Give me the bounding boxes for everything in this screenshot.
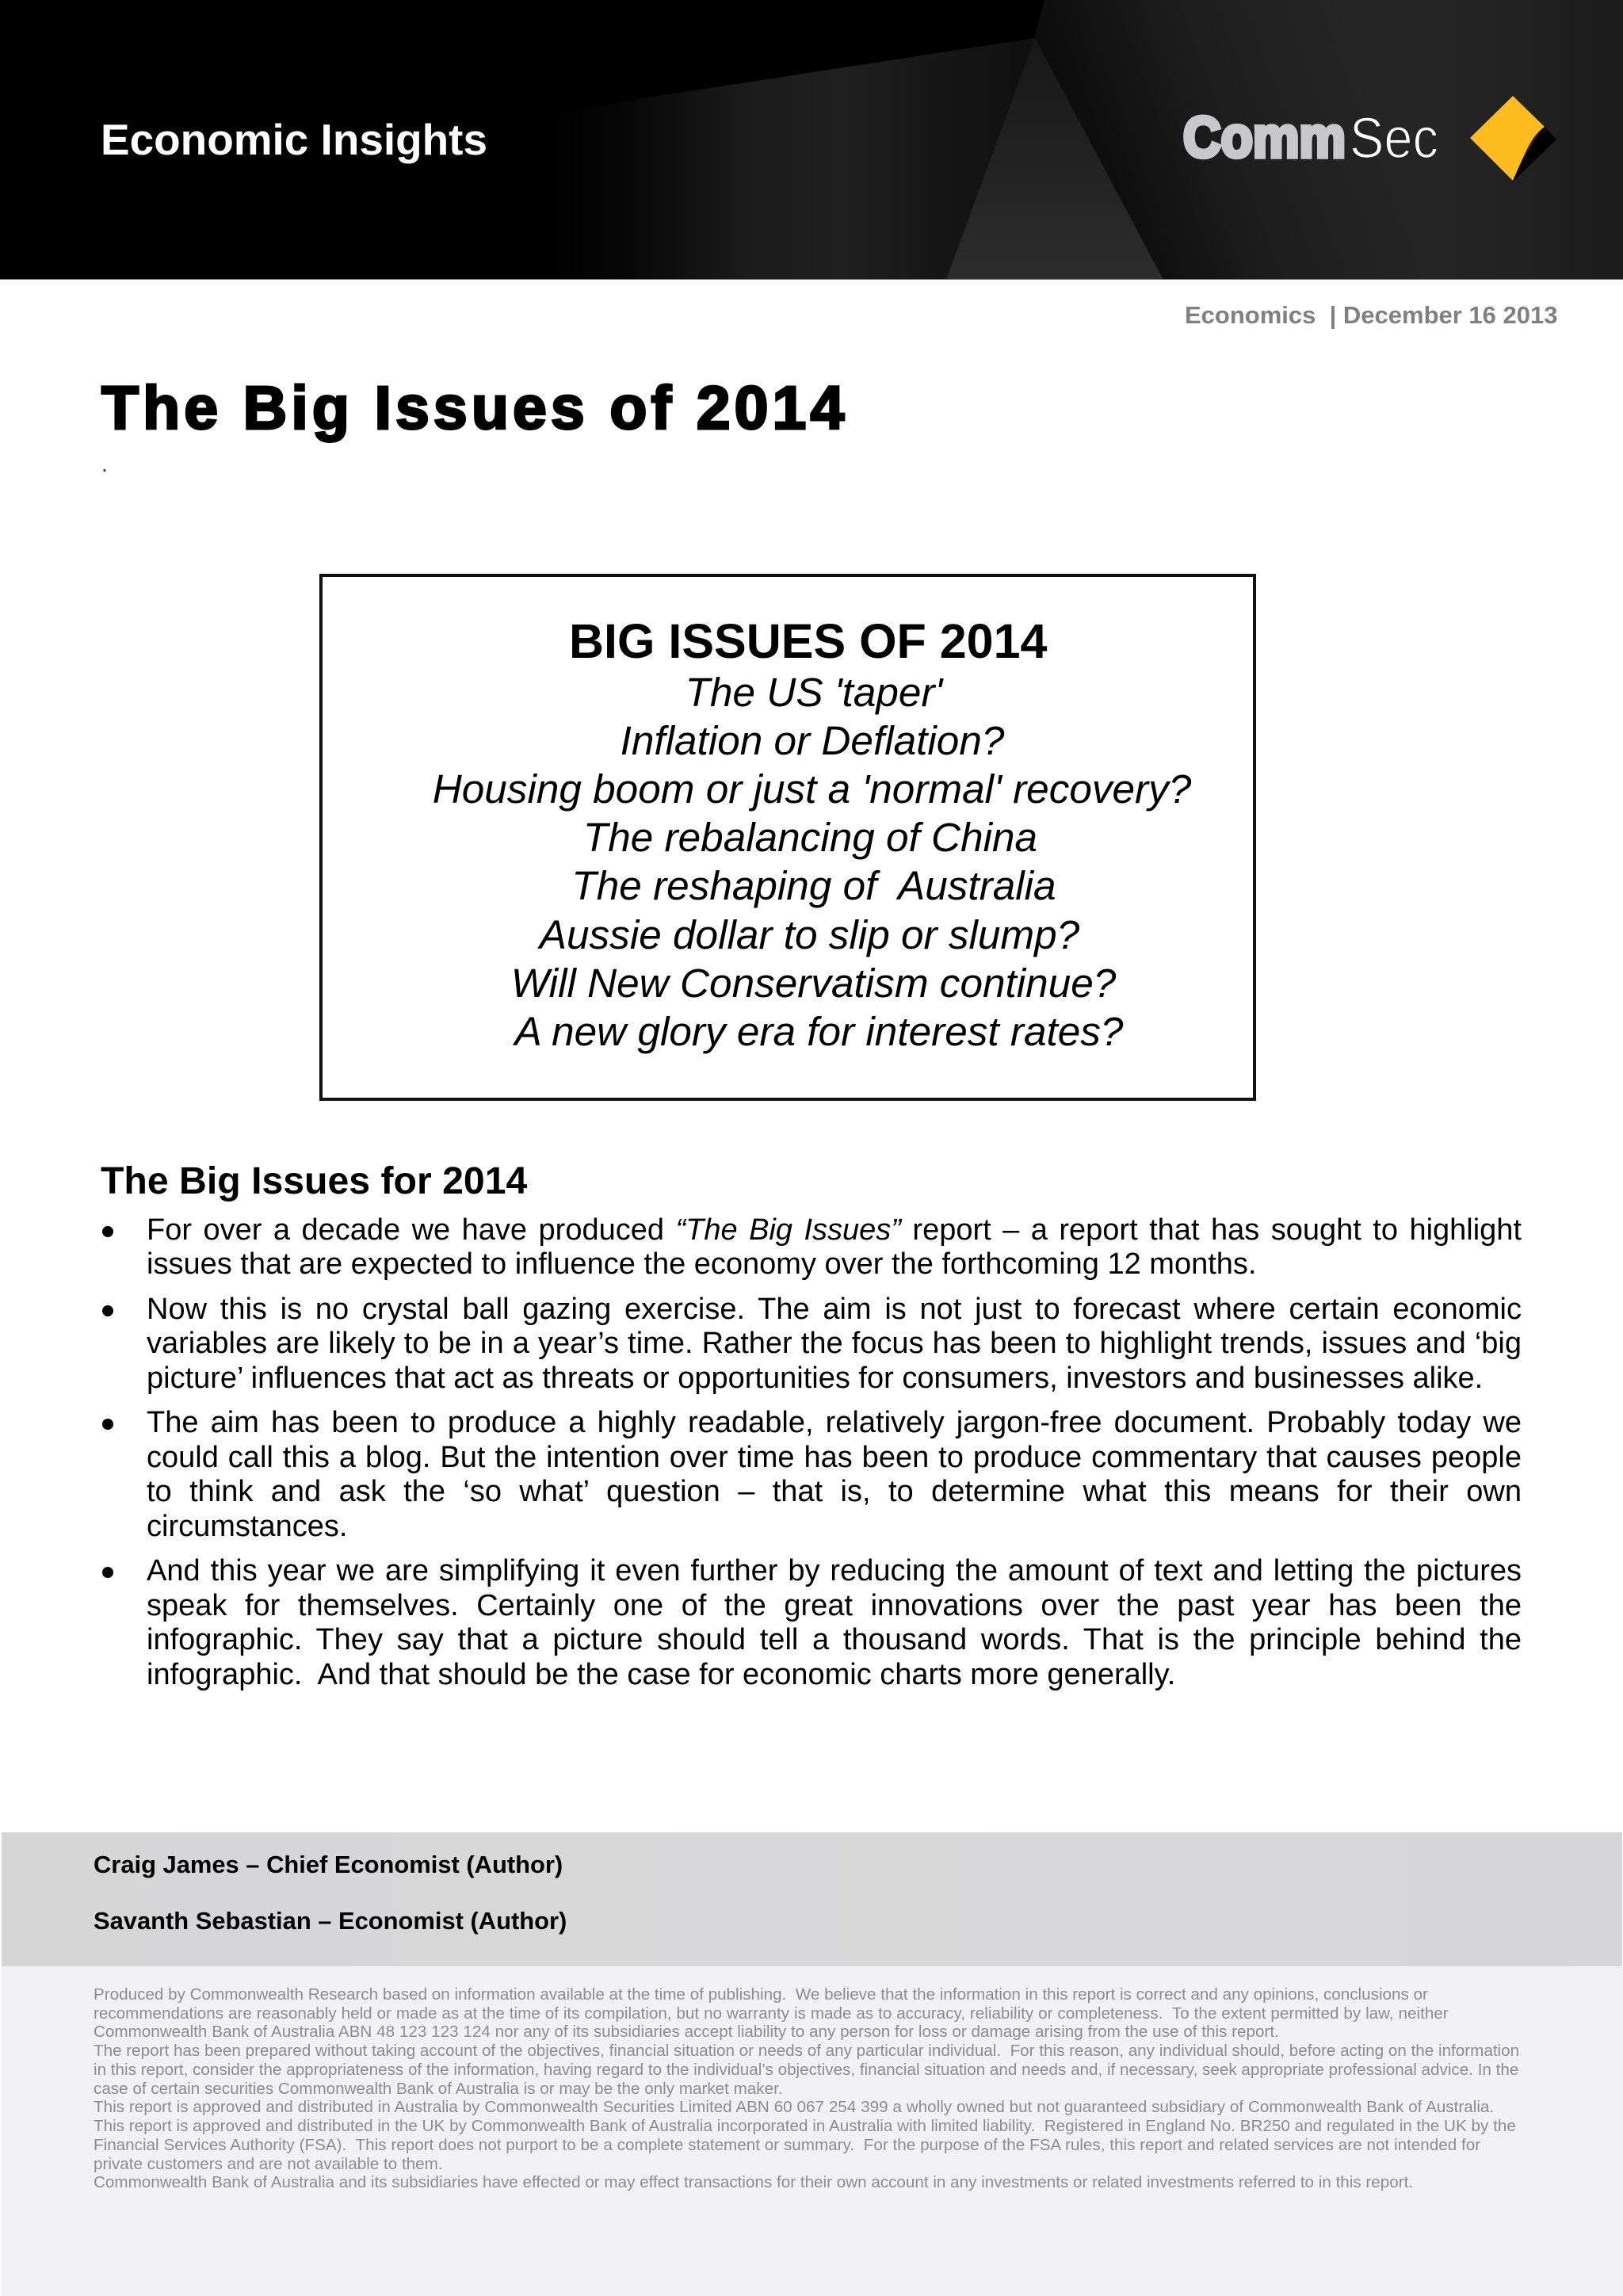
wordmark: Comm: Comm [1183, 106, 1346, 170]
list of issues: Will New Conservatism continue? [511, 961, 1116, 1005]
bullet paragraph 2: Now this is no crystal ball gazing exercise. The aim is not just to forecast where certain economic [147, 1293, 1522, 1326]
disclaimer text: Commonwealth Bank of Australia and its subsidiaries have effected or may effect transactions for their own account in any investments or related investments referred to in this report. [94, 2173, 1413, 2191]
header banner [0, 0, 1623, 280]
bullet paragraph 4: infographic. They say that a picture should tell a thousand words. That is the principle behind the [147, 1623, 1522, 1656]
disclaimer text: Financial Services Authority (FSA). This report does not purport to be a complete statement or summary. For the purpose of the FSA rules, this report and related services are not intended for [94, 2136, 1480, 2154]
bullet paragraph 4 [102, 1554, 1522, 1691]
disclaimer text [94, 1985, 1519, 2191]
bullet paragraph 1: issues that are expected to influence the economy over the forthcoming 12 months. [147, 1247, 1256, 1281]
stray dot under title: . [101, 452, 108, 476]
author: Craig James: Craig James – Chief Economist (Author) [94, 1850, 563, 1878]
box heading: BIG ISSUES OF 2014 [569, 614, 1047, 668]
bullet paragraph 3: circumstances. [147, 1510, 347, 1543]
bullet [102, 1305, 113, 1316]
list of issues: The US 'taper' [685, 670, 942, 715]
bullet paragraph 3 [102, 1406, 1522, 1543]
bullet paragraph 3: could call this a blog. But the intention over time has been to produce commentary that causes people [147, 1441, 1522, 1474]
disclaimer text: recommendations are reasonably held or made as at the time of its compilation, but no warranty is made as to accuracy, reliability or completeness. To the extent permitted by law, neither [94, 2004, 1449, 2023]
author: Savanth Sebastian: Savanth Sebastian – Economist (Author) [94, 1907, 567, 1934]
main title: The Big Issues of 2014 [101, 374, 848, 442]
panel: disclaimer [2, 1966, 1623, 2296]
list of issues: Inflation or Deflation? [621, 718, 1004, 763]
disclaimer text: in this report, consider the appropriateness of the information, having regard to the individual’s objectives, financial situation and needs and, if necessary, seek appropriate professional advice. In the [94, 2061, 1518, 2079]
bullet paragraph 4: And this year we are simplifying it even further by reducing the amount of text and letting the pictures [147, 1554, 1522, 1587]
bullet paragraph 1 [102, 1213, 1522, 1281]
disclaimer text: This report is approved and distributed in Australia by Commonwealth Securities Limited ABN 60 067 254 399 a wholly owned but not guaranteed subsidiary of Commonwealth Bank of Australia. [94, 2098, 1494, 2116]
list of issues: The reshaping of Australia [571, 863, 1056, 908]
bullet paragraph 1: For over a decade we have produced “The Big Issues” report – a report that has sought to highlight [147, 1213, 1522, 1247]
bullet paragraph 2: variables are likely to be in a year’s time. Rather the focus has been to highlight trends, issues and ‘big [147, 1327, 1522, 1360]
list of issues [433, 670, 1192, 1054]
disclaimer text: The report has been prepared without taking account of the objectives, financial situation or needs of any particular individual. For this reason, any individual should, before acting on the information [94, 2042, 1519, 2060]
bullet paragraph 3: The aim has been to produce a highly readable, relatively jargon-free document. Probably today we [147, 1406, 1522, 1439]
dateline: Economics | December 16 2013 [1185, 301, 1557, 329]
icon: diamond [1470, 96, 1556, 181]
bullet paragraph 2 [102, 1293, 1522, 1395]
disclaimer text: This report is approved and distributed in the UK by Commonwealth Bank of Australia incorporated in Australia with limited liability. Registered in England No. BR250 and regulated in the UK by the [94, 2117, 1516, 2135]
disclaimer text: Produced by Commonwealth Research based on information available at the time of publishing. We believe that the information in this report is correct and any opinions, conclusions or [94, 1985, 1428, 2004]
panel: big issues box [319, 574, 1256, 1101]
wordmark: Sec: Sec [1350, 107, 1438, 170]
panel: authors band [2, 1832, 1622, 1966]
disclaimer text: case of certain securities Commonwealth Bank of Australia is or may be the only market maker. [94, 2080, 783, 2098]
list of issues: The rebalancing of China [583, 815, 1037, 860]
bullet [102, 1567, 113, 1578]
bullet [102, 1226, 113, 1237]
list of issues: Housing boom or just a 'normal' recovery? [433, 766, 1191, 812]
section heading: The Big Issues for 2014 [101, 1159, 527, 1202]
bullet paragraph 4: infographic. And that should be the case for economic charts more generally. [147, 1658, 1175, 1691]
header title: Economic Insights: Economic Insights [101, 115, 487, 164]
list of issues: A new glory era for interest rates? [515, 1008, 1123, 1054]
logo: CommSec wordmark and diamond [1183, 96, 1556, 181]
bullet paragraph 4: speak for themselves. Certainly one of the great innovations over the past year has been the [147, 1589, 1522, 1622]
disclaimer text: Commonwealth Bank of Australia ABN 48 123 123 124 nor any of its subsidiaries accept liability to any person for loss or damage arising from the use of this report. [94, 2023, 1279, 2041]
bullet [102, 1419, 113, 1430]
bullet paragraph 2: picture’ influences that act as threats or opportunities for consumers, investors and businesses alike. [147, 1362, 1483, 1395]
bullet paragraph 3: to think and ask the ‘so what’ question – that is, to determine what this means for their own [147, 1475, 1522, 1508]
list of issues: Aussie dollar to slip or slump? [540, 911, 1079, 957]
disclaimer text: private customers and are not available to them. [94, 2155, 443, 2173]
